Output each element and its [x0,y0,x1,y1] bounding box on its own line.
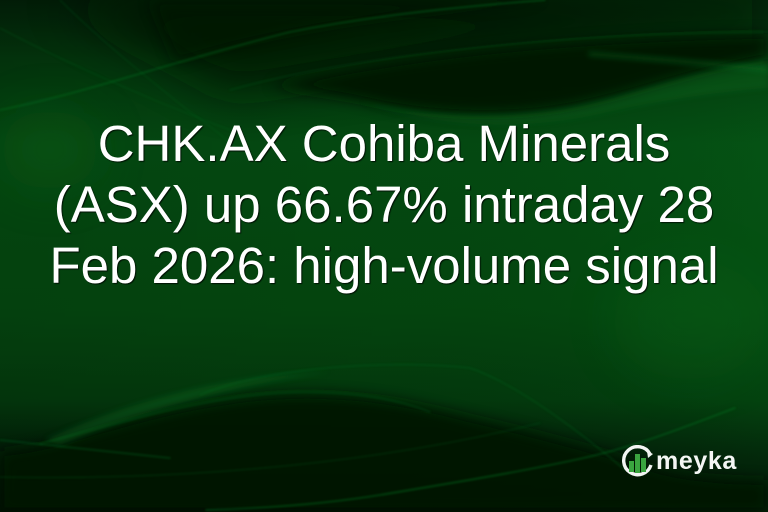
bottom ribbons [0,365,735,510]
title: Feb 2026: high-volume signal [49,237,719,294]
icon: ring with green bars [622,445,653,476]
right glow [612,260,768,380]
bottom dark mass [0,394,768,512]
title [49,115,719,295]
wordmark: meyka [656,447,737,475]
top dark sweep [60,0,768,92]
title: (ASX) up 66.67% intraday 28 [54,176,714,233]
top band [360,60,768,125]
top ribbon lines [0,0,768,150]
title: CHK.AX Cohiba Minerals [98,115,670,172]
logo: meyka [622,445,737,476]
